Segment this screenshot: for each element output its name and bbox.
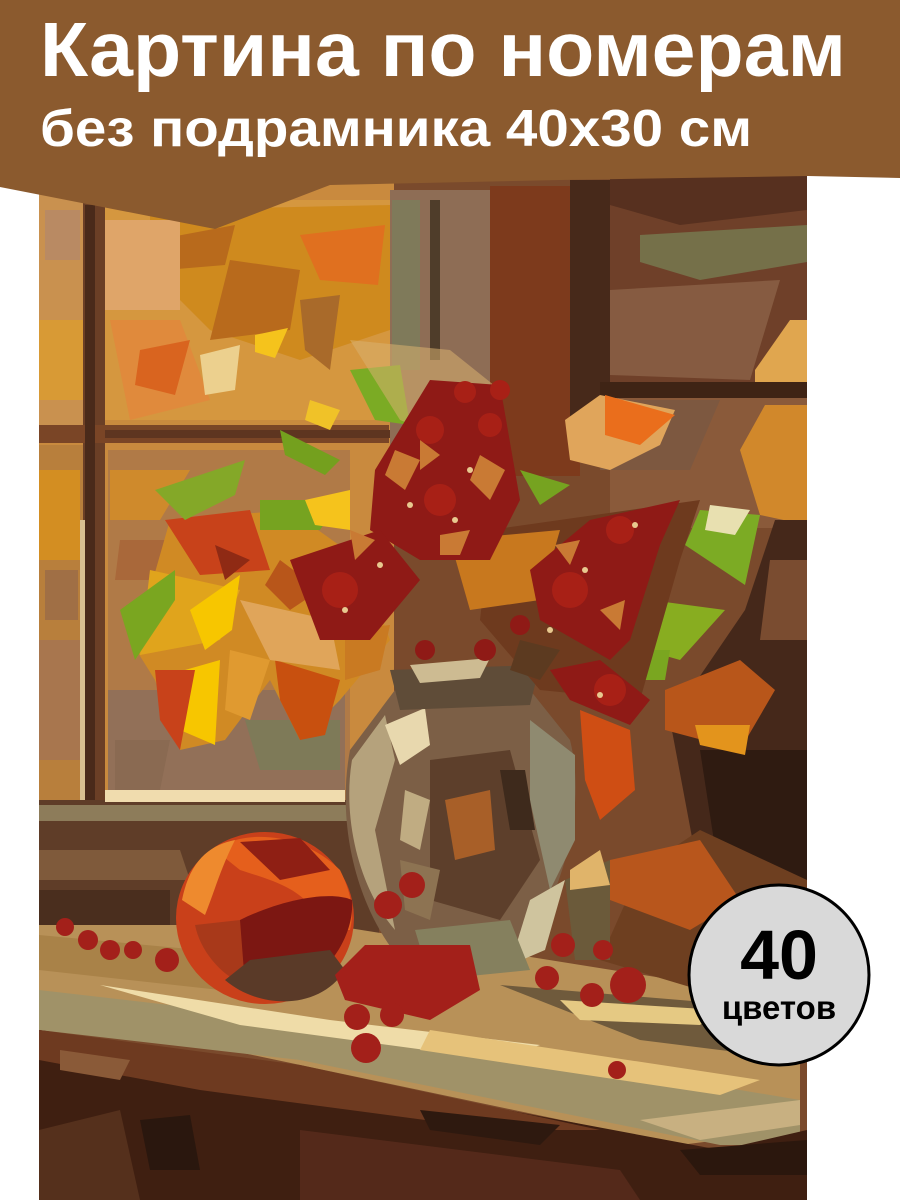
glass vase bbox=[346, 658, 576, 980]
badge: 40 colours bbox=[689, 885, 869, 1065]
foliage: leaves right bbox=[450, 395, 775, 820]
window background bbox=[39, 176, 394, 816]
dark right shadow and fallen leaves bbox=[565, 830, 807, 990]
subtitle: без подрамника 40х30 см bbox=[40, 100, 752, 158]
apple bbox=[176, 832, 354, 1004]
painting: autumn still life bbox=[39, 176, 807, 1200]
sill and table bbox=[39, 790, 807, 1200]
title: Картина по номерам bbox=[40, 7, 846, 93]
badge: 40 colours: 40 bbox=[740, 916, 818, 994]
top banner bbox=[0, 0, 900, 229]
fallen berries bbox=[56, 872, 646, 1079]
red berries bbox=[290, 380, 680, 725]
badge: 40 colours: цветов bbox=[722, 989, 836, 1026]
foliage: autumn leaves left bbox=[120, 340, 500, 750]
window frame bbox=[39, 200, 395, 810]
right wall and wooden post bbox=[390, 176, 807, 880]
